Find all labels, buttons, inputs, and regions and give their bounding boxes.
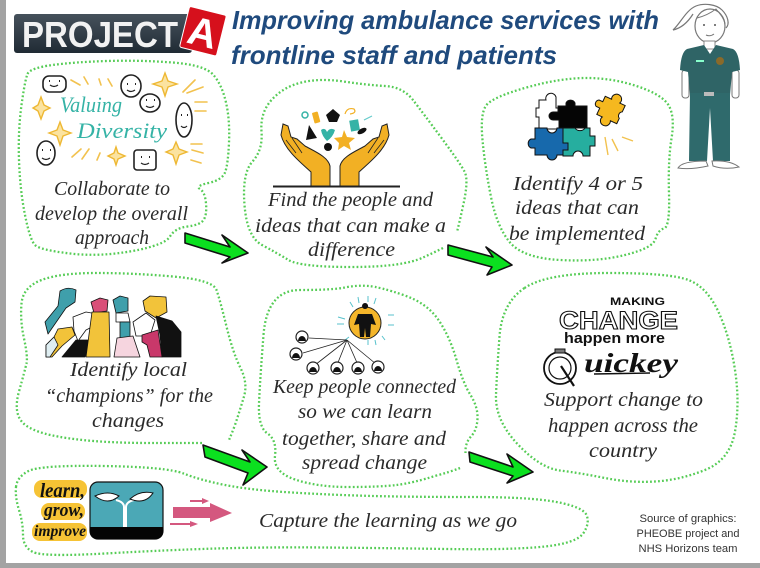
arrow 4 (469, 452, 533, 483)
source note: NHS Horizons team (638, 543, 738, 555)
icon: pink arrow (170, 498, 232, 527)
text: local champions: changes (92, 410, 164, 432)
panel: identify ideas (482, 78, 673, 260)
text: collaborate: Collaborate to (54, 178, 170, 200)
text: identify ideas: Identify 4 or 5 (512, 173, 643, 195)
logo: Project A: PROJECT (22, 14, 178, 55)
icon: valuing diversity faces and sparkles: Diversity (76, 118, 167, 143)
text: find the people: difference (308, 239, 395, 261)
logo: Project A: A (183, 8, 222, 58)
text: identify ideas: be implemented (509, 223, 646, 245)
panel: find the people (244, 80, 466, 267)
icon: raised fists (45, 288, 181, 357)
icon: valuing diversity faces and sparkles: Valuing (60, 92, 122, 117)
icon: making change happen more quickly lettering: MAKING (610, 296, 665, 308)
icon: learn grow improve: learn, (40, 480, 85, 502)
text: find the people: ideas that can make a (255, 215, 446, 237)
icon: making change happen more quickly lettering: uickey (584, 348, 679, 378)
source note: Source of graphics: (640, 513, 736, 525)
logo: Project A (14, 6, 226, 59)
arrow 1 (185, 233, 248, 263)
arrow 3 (203, 445, 267, 485)
icon: making change happen more quickly lettering: happen more (564, 330, 665, 347)
panel: keep people connected (259, 286, 478, 487)
text: capture the learning: Capture the learning as we go (259, 510, 517, 532)
icon: learn grow improve: improve (34, 523, 86, 540)
panel: capture the learning (16, 466, 588, 555)
text: find the people: Find the people and (267, 189, 434, 211)
icon: connected network around a leader (290, 296, 394, 374)
text: identify ideas (509, 173, 646, 245)
icon: learn grow improve: grow, (43, 500, 84, 521)
text: support change: country (589, 440, 657, 462)
icon: valuing diversity faces and sparkles (33, 73, 207, 170)
icon: making change happen more quickly lettering (544, 296, 679, 386)
title (231, 5, 659, 70)
text: support change: Support change to (544, 389, 703, 411)
text: keep people connected: so we can learn (298, 401, 432, 423)
text: collaborate (35, 178, 188, 249)
text: keep people connected (272, 376, 457, 474)
text: keep people connected: spread change (302, 452, 427, 474)
text: local champions: “champions” for the (45, 385, 213, 407)
text: keep people connected: Keep people connected (272, 376, 457, 398)
source note (636, 513, 740, 555)
text: keep people connected: together, share and (282, 428, 447, 450)
source note: PHEOBE project and (636, 528, 740, 540)
icon: jigsaw puzzle pieces (528, 87, 633, 160)
icon: hands holding shapes (273, 109, 400, 188)
title: frontline staff and patients (231, 40, 557, 70)
panel: collaborate (19, 61, 229, 255)
text: collaborate: approach (75, 227, 149, 249)
text: find the people (255, 189, 446, 261)
panel: support change (496, 273, 738, 482)
icon: learn grow improve (32, 480, 163, 541)
title: Improving ambulance services with (232, 5, 659, 35)
text: support change: happen across the (548, 415, 698, 437)
text: local champions (45, 359, 213, 432)
text: local champions: Identify local (69, 359, 187, 381)
panel: local champions (17, 273, 245, 443)
text: support change (544, 389, 703, 462)
text: identify ideas: ideas that can (515, 197, 639, 219)
illustration: paramedic in green uniform (673, 4, 740, 169)
text: collaborate: develop the overall (35, 203, 188, 225)
icon: making change happen more quickly lettering: CHANGE (559, 307, 678, 335)
arrow 2 (448, 245, 512, 275)
